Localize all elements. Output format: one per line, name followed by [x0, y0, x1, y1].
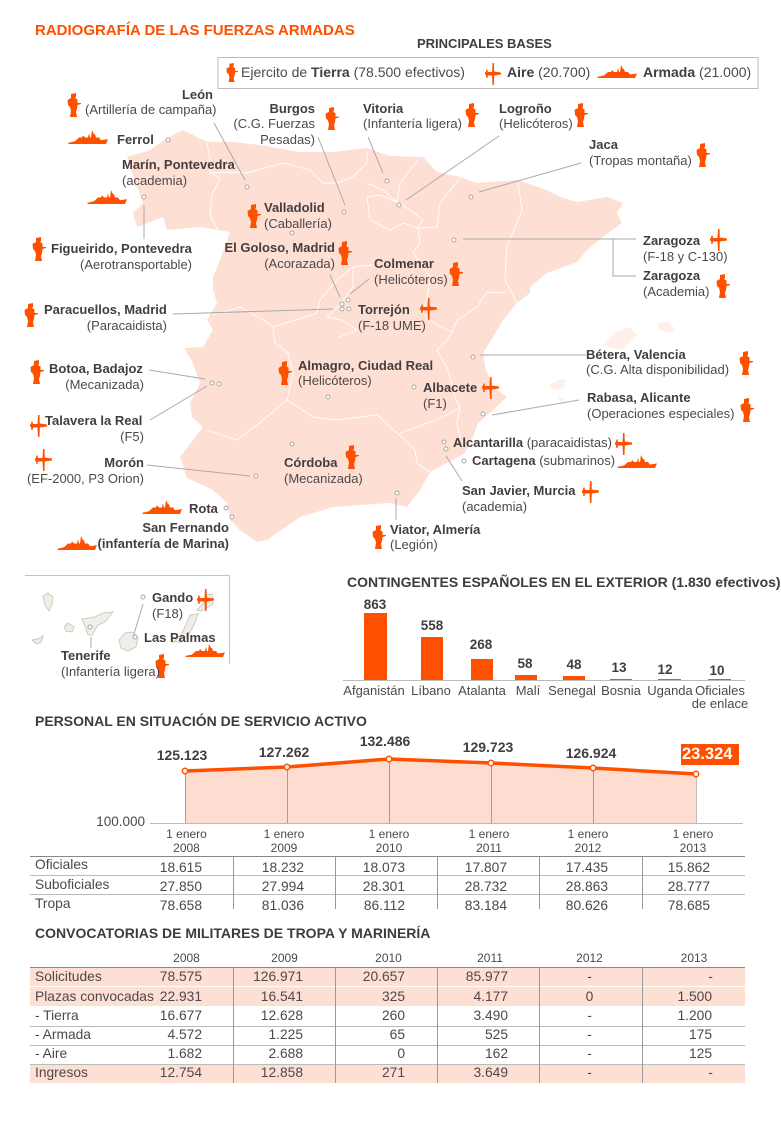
base: San Fernando	[57, 520, 229, 551]
table: recruitment calls: 0	[397, 1046, 405, 1061]
table: recruitment calls: -	[587, 1008, 592, 1023]
base: Gando: Gando	[152, 590, 193, 605]
base: Morón	[27, 449, 144, 486]
base: Colmenar: Colmenar	[374, 256, 434, 271]
base: Las Palmas	[144, 630, 225, 657]
base: Almagro: Almagro, Ciudad Real	[298, 358, 433, 373]
base: Botoa: (Mecanizada)	[65, 377, 144, 392]
base: Tenerife	[61, 648, 169, 679]
table: recruitment calls: Ingresos	[35, 1065, 88, 1080]
line chart: active personnel: 2012	[575, 841, 602, 855]
table: recruitment calls: 2011	[477, 951, 503, 965]
table: recruitment calls: 2013	[681, 951, 708, 965]
base: Rabasa	[587, 390, 754, 422]
table: recruitment calls: Plazas convocadas	[35, 989, 154, 1004]
base: Rabasa: Rabasa, Alicante	[587, 390, 691, 405]
base: Morón: (EF-2000, P3 Orion)	[27, 471, 144, 486]
table: recruitment calls: 4.177	[473, 989, 508, 1004]
table: recruitment calls: 3.490	[473, 1008, 508, 1023]
base: San Javier: (academia)	[462, 499, 527, 514]
bar chart: contingents: 558	[421, 618, 444, 633]
table: recruitment calls: 1.500	[677, 989, 712, 1004]
table: recruitment calls: 1.682	[167, 1046, 202, 1061]
table: personnel breakdown: 83.184	[465, 898, 507, 913]
table: recruitment calls: -	[708, 1065, 713, 1080]
table: personnel breakdown: 27.850	[160, 879, 202, 894]
table: recruitment calls: 4.572	[167, 1027, 202, 1042]
bar chart: contingents: Atalanta	[458, 683, 507, 698]
base: Burgos	[233, 101, 339, 147]
base: Córdoba	[284, 445, 363, 486]
base: Rota: Rota	[189, 501, 219, 516]
bar chart: contingents: Afganistán	[343, 683, 405, 698]
table: recruitment calls: 2010	[375, 951, 402, 965]
line chart: active personnel: 132.486	[360, 733, 411, 749]
legend: Armada (21.000)	[643, 64, 751, 80]
table: recruitment calls: 2.688	[268, 1046, 303, 1061]
base: Logroño: Logroño	[499, 101, 552, 116]
line chart: active personnel: 1 enero	[166, 827, 207, 841]
base: Botoa: Botoa, Badajoz	[49, 361, 143, 376]
base: Gando: (F18)	[152, 606, 183, 621]
base: Bétera	[586, 347, 753, 377]
base: Alcantarilla	[453, 433, 632, 455]
base: Viator: (Legión)	[390, 537, 438, 552]
base: Torrejón	[358, 298, 437, 333]
table: recruitment calls	[30, 951, 745, 1083]
base: Figueirido: Figueirido, Pontevedra	[51, 241, 193, 256]
table: recruitment calls: 85.977	[466, 969, 508, 984]
table: recruitment calls: -	[587, 1065, 592, 1080]
table: recruitment calls: - Aire	[35, 1046, 68, 1061]
table: recruitment calls: 2009	[271, 951, 298, 965]
base: Zaragoza air	[643, 229, 728, 264]
heading: contingentes: CONTINGENTES ESPAÑOLES EN EL EXTERIOR (1.830 efectivos)	[347, 573, 781, 590]
table: personnel breakdown: 80.626	[566, 898, 608, 913]
table: recruitment calls: 65	[390, 1027, 405, 1042]
heading: personal: PERSONAL EN SITUACIÓN DE SERVICIO ACTIVO	[35, 712, 367, 729]
legend: Ejercito de Tierra (78.500 efectivos)	[241, 64, 465, 80]
base: Viator	[372, 522, 481, 552]
bar chart: contingents: 12	[657, 662, 673, 677]
base: Logroño: (Helicóteros)	[499, 116, 573, 131]
base: Almagro: (Helicóteros)	[298, 373, 372, 388]
table: recruitment calls: Solicitudes	[35, 969, 102, 984]
base: El Goloso: (Acorazada)	[264, 256, 335, 271]
base: Zaragoza academy: (Academia)	[643, 284, 709, 299]
table: recruitment calls: -	[708, 969, 713, 984]
base: Jaca	[589, 137, 710, 168]
base: Las Palmas: Las Palmas	[144, 630, 216, 645]
table: personnel breakdown: 18.232	[262, 860, 304, 875]
table: recruitment calls: 1.225	[268, 1027, 303, 1042]
line chart: active personnel: 2013	[680, 841, 707, 855]
table: personnel breakdown: 78.658	[160, 898, 202, 913]
table: recruitment calls: 162	[485, 1046, 508, 1061]
line chart: active personnel: 1 enero	[469, 827, 510, 841]
table: personnel breakdown: Oficiales	[35, 857, 88, 872]
base: Ferrol: Ferrol	[117, 132, 154, 147]
bar chart: contingents: Malí	[516, 683, 541, 698]
line chart: active personnel: 1 enero	[673, 827, 714, 841]
line chart: active personnel	[96, 733, 743, 855]
base: San Fernando: (infantería de Marina)	[98, 536, 229, 551]
base: Rabasa: (Operaciones especiales)	[587, 406, 734, 421]
table: personnel breakdown: 28.777	[668, 879, 710, 894]
base: Almagro	[278, 358, 433, 388]
base: Jaca: (Tropas montaña)	[589, 153, 692, 168]
table: recruitment calls: -	[587, 1046, 592, 1061]
base: León: (Artillería de campaña)	[85, 102, 216, 117]
table: personnel breakdown: Suboficiales	[35, 877, 109, 892]
table: recruitment calls: 126.971	[253, 969, 303, 984]
bar chart: contingents: Líbano	[411, 683, 451, 698]
base: Córdoba: (Mecanizada)	[284, 471, 363, 486]
table: personnel breakdown: 81.036	[262, 898, 304, 913]
line chart: active personnel: 125.123	[157, 747, 208, 763]
base: Tenerife: (Infantería ligera)	[61, 664, 160, 679]
bar chart: contingents: Oficiales	[695, 683, 745, 698]
base: Ferrol	[68, 130, 154, 147]
table: recruitment calls: 325	[382, 989, 405, 1004]
base: Colmenar: (Helicóteros)	[374, 272, 448, 287]
base: Talavera: (F5)	[120, 429, 144, 444]
table: personnel breakdown	[30, 856, 745, 913]
line chart: active personnel: 1 enero	[568, 827, 609, 841]
base: Torrejón: Torrejón	[358, 302, 410, 317]
table: recruitment calls: 20.657	[363, 969, 405, 984]
table: recruitment calls: 1.200	[677, 1008, 712, 1023]
base: Albacete: (F1)	[423, 396, 447, 411]
title: RADIOGRAFÍA DE LAS FUERZAS ARMADAS	[35, 22, 355, 39]
base: Jaca: Jaca	[589, 137, 619, 152]
bar chart: contingents: 863	[364, 597, 387, 612]
table: recruitment calls: 525	[485, 1027, 508, 1042]
line chart: active personnel: 127.262	[259, 744, 310, 760]
base: Morón: Morón	[104, 455, 144, 470]
base: Rota	[142, 500, 219, 516]
table: recruitment calls: 3.649	[473, 1065, 508, 1080]
base: Burgos: Burgos	[270, 101, 315, 116]
base: Viator: Viator, Almería	[390, 522, 481, 537]
base: Talavera: Talavera la Real	[45, 413, 142, 428]
base: Bétera: (C.G. Alta disponibilidad)	[586, 362, 729, 377]
table: recruitment calls: - Tierra	[35, 1008, 79, 1023]
line chart: active personnel: 2009	[271, 841, 298, 855]
map of Spain	[127, 130, 676, 542]
base: León	[68, 87, 216, 117]
base markers	[142, 138, 485, 519]
table: personnel breakdown: 18.615	[160, 860, 202, 875]
table: personnel breakdown: 78.685	[668, 898, 710, 913]
base: Albacete	[423, 377, 499, 411]
table: recruitment calls: - Armada	[35, 1027, 91, 1042]
base: Tenerife: Tenerife	[61, 648, 111, 663]
bar chart: contingents: 48	[566, 657, 582, 672]
bar chart: contingents: 58	[517, 656, 533, 671]
table: personnel breakdown: Tropa	[35, 896, 71, 911]
base: Figueirido: (Aerotransportable)	[80, 257, 192, 272]
bar chart: contingents: 13	[611, 660, 627, 675]
bar chart: contingents: 268	[470, 637, 493, 652]
base: Vitoria: Vitoria	[363, 101, 404, 116]
table: recruitment calls: 12.754	[160, 1065, 202, 1080]
line chart: active personnel: 2008	[173, 841, 200, 855]
heading: principales bases: PRINCIPALES BASES	[417, 36, 552, 51]
base: Zaragoza air: Zaragoza	[643, 233, 701, 248]
bar chart: contingents: Bosnia	[601, 683, 642, 698]
table: personnel breakdown: 28.863	[566, 879, 608, 894]
base: Alcantarilla: Alcantarilla (paracaidistas)	[453, 435, 612, 450]
line chart: active personnel: 1 enero	[369, 827, 410, 841]
table: recruitment calls: 12.628	[261, 1008, 303, 1023]
base: Bétera: Bétera, Valencia	[586, 347, 686, 362]
base: Valladolid: (Caballería)	[264, 216, 332, 231]
bar chart: contingents: Senegal	[548, 683, 596, 698]
base: San Fernando: San Fernando	[142, 520, 229, 535]
base: Logroño	[499, 101, 588, 131]
table: recruitment calls: 16.677	[160, 1008, 202, 1023]
bar chart: contingents: de enlace	[692, 696, 748, 711]
table: recruitment calls: 78.575	[160, 969, 202, 984]
base: Paracuellos: Paracuellos, Madrid	[44, 302, 167, 317]
base: San Javier: San Javier, Murcia	[462, 483, 576, 498]
line chart: active personnel: 126.924	[566, 745, 617, 761]
table: recruitment calls: 175	[689, 1027, 712, 1042]
bar chart: contingents: 10	[709, 663, 725, 678]
table: personnel breakdown: 18.073	[363, 860, 405, 875]
base: San Javier	[462, 481, 599, 514]
balearic islands	[550, 321, 676, 402]
base: Albacete: Albacete	[423, 380, 477, 395]
table: personnel breakdown: 86.112	[364, 898, 405, 913]
legend: Aire (20.700)	[507, 64, 590, 80]
base: Botoa	[30, 360, 144, 392]
table: recruitment calls: 22.931	[160, 989, 202, 1004]
base: Córdoba: Córdoba	[284, 455, 338, 470]
base: Burgos: Pesadas)	[260, 132, 315, 147]
base: Figueirido	[32, 237, 193, 272]
highlighted value: 23.324	[682, 745, 733, 763]
base: Gando	[152, 589, 214, 621]
base: Zaragoza air: (F-18 y C-130)	[643, 249, 728, 264]
base: Zaragoza academy	[643, 268, 730, 299]
base: León: León	[182, 87, 213, 102]
table: recruitment calls: 125	[689, 1046, 712, 1061]
base: Colmenar	[374, 256, 463, 287]
islands	[32, 593, 213, 651]
legend	[218, 58, 758, 88]
table: recruitment calls: 12.858	[261, 1065, 303, 1080]
leader lines	[144, 123, 636, 520]
bar chart: contingents: Uganda	[647, 683, 694, 698]
base: Cartagena: Cartagena (submarinos)	[472, 453, 615, 468]
table: recruitment calls: 260	[382, 1008, 405, 1023]
base: Valladolid	[248, 200, 332, 231]
table: recruitment calls: 2012	[576, 951, 603, 965]
table: recruitment calls: 271	[382, 1065, 405, 1080]
table: personnel breakdown: 17.435	[566, 860, 608, 875]
panel: Canary Islands inset	[25, 576, 230, 679]
table: personnel breakdown: 17.807	[465, 860, 507, 875]
base: Paracuellos	[24, 302, 167, 333]
base: Vitoria	[363, 101, 479, 131]
base: El Goloso	[224, 240, 352, 271]
base: Marín: Marín, Pontevedra	[122, 157, 235, 172]
base: Talavera	[30, 413, 144, 444]
base: Marín: (academia)	[122, 173, 187, 188]
base: Paracuellos: (Paracaidista)	[87, 318, 167, 333]
table: recruitment calls: 0	[586, 989, 594, 1004]
line chart: active personnel: 2010	[376, 841, 403, 855]
base: Marín	[87, 157, 235, 204]
line chart: active personnel: 129.723	[463, 739, 514, 755]
base: Zaragoza academy: Zaragoza	[643, 268, 701, 283]
line chart: active personnel: 2011	[476, 841, 502, 855]
line chart: active personnel: 100.000	[96, 814, 145, 829]
base: Valladolid: Valladolid	[264, 200, 325, 215]
base: Burgos: (C.G. Fuerzas	[233, 116, 315, 131]
base: Torrejón: (F-18 UME)	[358, 318, 426, 333]
table: personnel breakdown: 27.994	[262, 879, 304, 894]
table: recruitment calls: -	[587, 969, 592, 984]
table: personnel breakdown: 28.732	[465, 879, 507, 894]
base: Vitoria: (Infantería ligera)	[363, 116, 462, 131]
table: recruitment calls: 2008	[173, 951, 200, 965]
table: recruitment calls: 16.541	[261, 989, 303, 1004]
line chart: active personnel: 1 enero	[264, 827, 305, 841]
table: recruitment calls: -	[587, 1027, 592, 1042]
bar chart: contingents	[343, 597, 748, 711]
heading: convocatorias: CONVOCATORIAS DE MILITARES DE TROPA Y MARINERÍA	[35, 925, 430, 941]
table: personnel breakdown: 28.301	[363, 879, 405, 894]
base: El Goloso: El Goloso, Madrid	[224, 240, 335, 255]
table: personnel breakdown: 15.862	[668, 860, 710, 875]
